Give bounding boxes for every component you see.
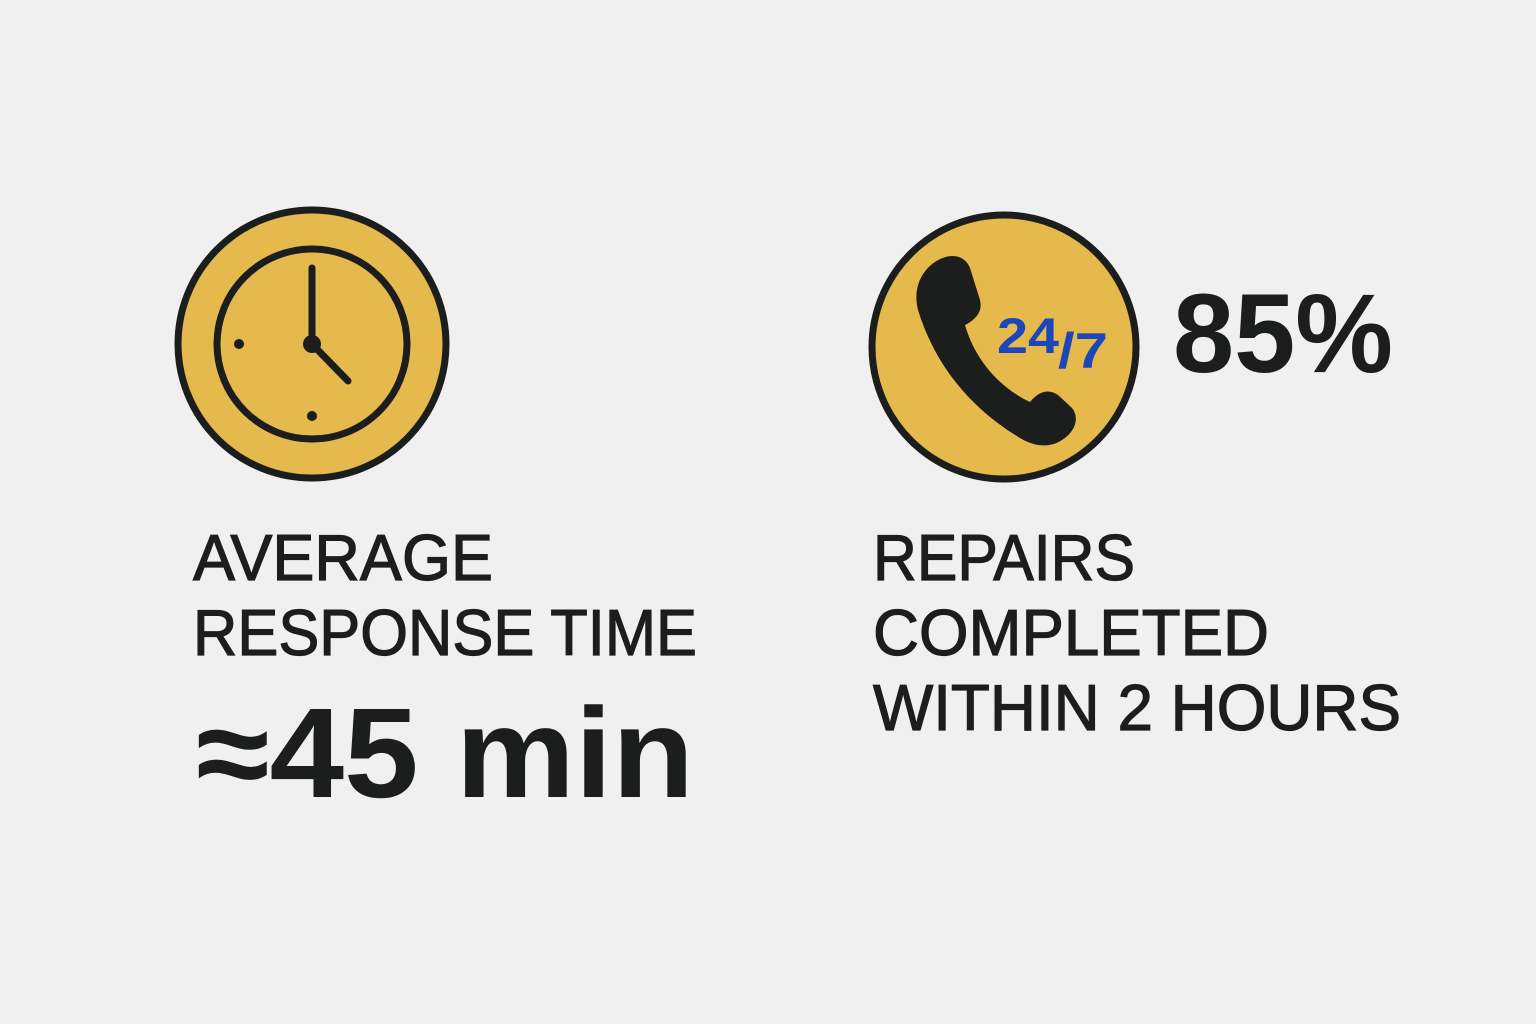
icon: phone 24/7: 24	[997, 308, 1059, 364]
icon: clock	[178, 210, 446, 478]
label: repairs completed: COMPLETED	[873, 596, 1269, 669]
label: repairs completed	[873, 521, 1401, 744]
icon: phone 24/7: /7	[1058, 323, 1108, 379]
label: repairs completed: WITHIN 2 HOURS	[873, 671, 1401, 744]
stat: 45 min: ≈45 min	[196, 682, 694, 825]
stat: 85%: 85%	[1173, 271, 1393, 396]
label: repairs completed: REPAIRS	[873, 521, 1135, 594]
label: average response time: RESPONSE TIME	[193, 596, 697, 669]
label: average response time	[193, 521, 697, 669]
icon: phone 24/7	[872, 215, 1136, 479]
label: average response time: AVERAGE	[193, 521, 493, 594]
